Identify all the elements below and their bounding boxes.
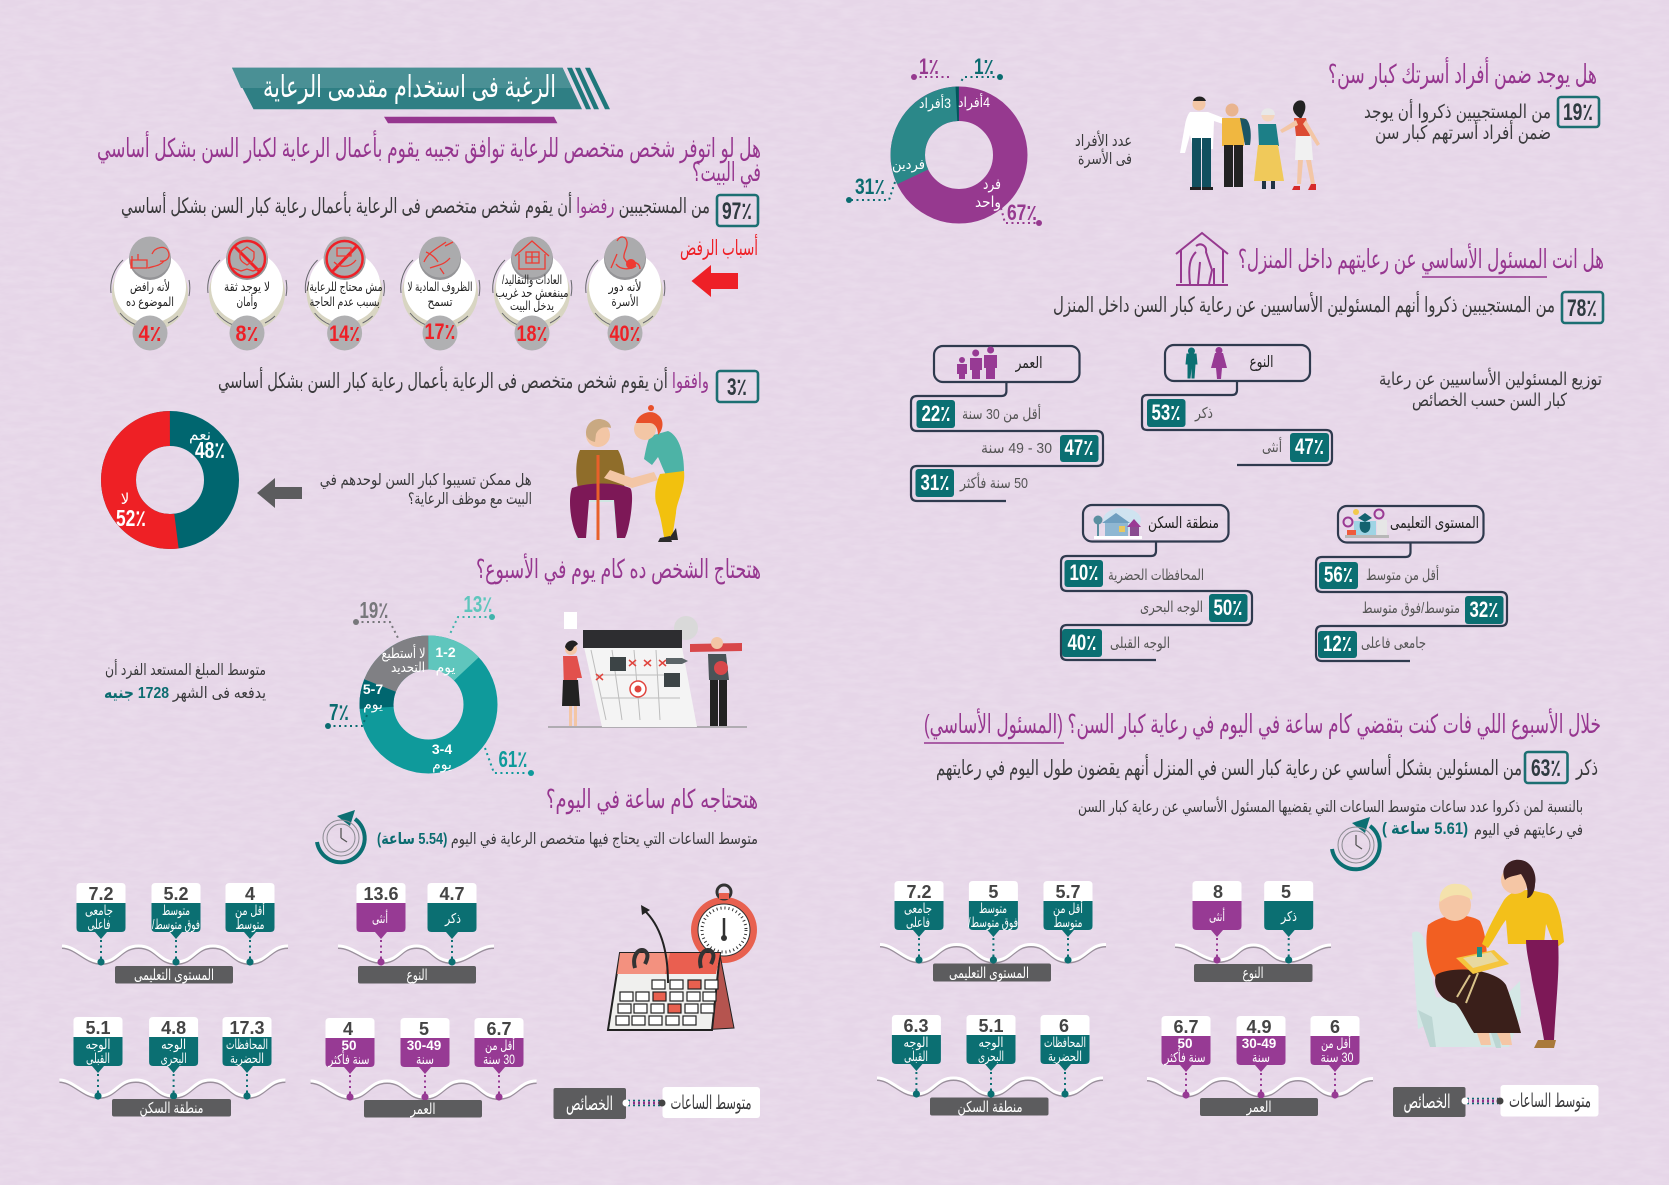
illustration: calendar and stopwatch (608, 885, 757, 1030)
card: age: 50 سنة فأكثر (959, 472, 1028, 492)
callout: 19 percent (353, 597, 399, 640)
callout group: gender right: 8 (1213, 882, 1223, 902)
text: leaving elderly alone: البيت مع موظف الرعاية؟ (408, 491, 532, 509)
callout group: gender right: النوع (1242, 965, 1264, 982)
callout: household 67 percent: 67٪ (1007, 200, 1037, 225)
icon: family silhouettes (957, 346, 997, 379)
card: residence: 10٪ (1070, 560, 1098, 585)
callout: household 31 percent: 31٪ (855, 174, 885, 199)
callout group: education right: 7.2 (906, 882, 932, 902)
donut chart: household size: فردين (892, 156, 925, 173)
donut chart: leave alone yes no: 52٪ (116, 505, 146, 531)
card: age: 47٪ (1064, 435, 1094, 460)
callout group: gender left (338, 883, 494, 984)
title banner: الرغبة فى استخدام مقدمى الرعاية (263, 71, 556, 104)
callout group: residence right (877, 1015, 1103, 1116)
reason: family role 40 (586, 236, 665, 350)
card: gender: 53٪ (1152, 400, 1180, 425)
callout group: education left: جامعى (85, 903, 113, 918)
callout: household 1 percent teal (960, 54, 1003, 83)
text: average amount: متوسط المبلغ المستعد الفرد أن (105, 659, 266, 680)
callout group: education right: متوسط (979, 901, 1007, 917)
title banner (232, 68, 610, 123)
reason: no need 14: مش محتاج للرعاية/ (307, 280, 383, 295)
illustration: carer with elderly woman (1412, 860, 1564, 1048)
callout group: residence left: الحضرية (230, 1051, 264, 1067)
card: gender: أنثى (1262, 437, 1282, 456)
heading: question line two: في البيت؟ (692, 157, 761, 187)
card: residence: المحافظات الحضرية (1108, 567, 1204, 584)
stat: 63 percent: ذكر (1575, 757, 1598, 780)
donut chart: days per week: 5-7 (363, 681, 383, 697)
callout group: age right: 30-49 (1242, 1036, 1276, 1051)
callout group: residence right: 5.1 (978, 1016, 1004, 1036)
text: distribution: كبار السن حسب الخصائص (1412, 390, 1567, 411)
stat: 3 percent agreed (218, 366, 758, 402)
card: education: 56٪ (1324, 562, 1353, 587)
donut chart: household size: 3أفراد (919, 94, 951, 112)
text: average hours main carer: في رعايتهم في اليوم (1474, 822, 1583, 840)
donut chart: household size: 4أفراد (958, 93, 990, 111)
stat: 97 percent refused: 97٪ (722, 198, 752, 225)
reason: family role 40: 40٪ (610, 321, 640, 346)
donut chart: leave alone yes no: 48٪ (195, 437, 225, 463)
reason: traditions 18 (493, 236, 572, 350)
callout group: gender right (1175, 881, 1331, 982)
donut chart: days per week: يوم (363, 696, 383, 713)
callout: 13 percent: 13٪ (464, 591, 492, 617)
card: residence: 40٪ (1068, 630, 1096, 655)
text: household size: عدد الأفراد (1075, 130, 1132, 151)
donut chart: days per week (363, 644, 480, 773)
stat: 97 percent refused (121, 191, 758, 226)
arrow: red (692, 265, 738, 297)
callout group: age right: سنة (1252, 1050, 1270, 1065)
reason: no trust 8: وأمان (236, 293, 258, 310)
callout: 61 percent (485, 746, 534, 776)
reason: finances 17 (401, 236, 480, 350)
reason: rejects topic 4: لأنه رافض (130, 279, 170, 295)
callout group: gender right: أنثى (1209, 907, 1225, 924)
reason: traditions 18: مينفعش حد غريب (496, 286, 568, 301)
callout group: education right (880, 881, 1106, 982)
callout group: residence left (59, 1017, 285, 1117)
callout group: gender right: 5 (1281, 882, 1291, 902)
stat: 63 percent (936, 752, 1598, 783)
callout group: residence right: البحرى (978, 1049, 1004, 1065)
icon: man (1186, 348, 1198, 378)
callout group: education right: فوق متوسط/ (968, 915, 1018, 931)
reason: rejects topic 4: 4٪ (138, 321, 162, 346)
donut chart: household size (892, 93, 1010, 211)
callout group: education left: متوسط (236, 917, 264, 933)
text: distribution: توزيع المسئولين الأساسيين عن رعاية (1379, 368, 1602, 390)
callout group: gender left: 4.7 (439, 884, 465, 904)
callout group: age left: سنة (416, 1052, 434, 1067)
stat: 19 percent (1364, 97, 1599, 144)
callout group: gender left: ذكر (444, 911, 461, 927)
callout group: age left: سنة فأكثر (328, 1050, 370, 1068)
callout: household 1 percent purple: 1٪ (919, 54, 939, 79)
callout group: age right: 50 (1177, 1036, 1193, 1051)
callout group: education right: 5.7 (1055, 882, 1081, 902)
stat: 3 percent agreed: 3٪ (727, 374, 747, 401)
callout group: gender left: النوع (406, 967, 428, 984)
card: education: جامعى فاعلى (1361, 635, 1426, 652)
callout group: education left: 4 (245, 884, 255, 904)
callout group: education left: 7.2 (88, 884, 114, 904)
callout: household 31 percent (846, 174, 895, 203)
card: gender (1142, 345, 1332, 465)
callout group: age right: 30 سنة (1320, 1050, 1354, 1065)
donut chart: household size: فرد (983, 176, 1001, 193)
reason: finances 17: تسمح (428, 295, 453, 309)
callout group: age left: 4 (343, 1019, 353, 1039)
heading: days per week: هتحتاج الشخص ده كام يوم في الأسبوع؟ (476, 552, 761, 585)
callout group: residence left: منطقة السكن (140, 1100, 204, 1117)
callout group: residence left: 4.8 (161, 1018, 186, 1038)
card: education (1316, 506, 1507, 661)
callout group: residence left: الوجه (86, 1037, 110, 1053)
callout group: gender right: ذكر (1280, 909, 1297, 925)
legend left (554, 1087, 760, 1119)
callout group: residence right: المحافظات (1044, 1035, 1086, 1050)
heading: hours per day: هتحتاجه كام ساعة في اليوم؟ (546, 784, 758, 815)
card: education: متوسط/فوق متوسط (1362, 600, 1460, 617)
callout group: age left: 30 سنة (483, 1052, 515, 1067)
reason: traditions 18: يدخل البيت (510, 299, 554, 313)
reason: family role 40: لأنه دور (608, 279, 642, 295)
callout group: residence right: 6 (1059, 1016, 1069, 1036)
callout group: age left: 50 (341, 1038, 357, 1053)
text: household size: فى الأسرة (1078, 148, 1132, 169)
donut chart: days per week: التحديد (391, 659, 425, 675)
text: average amount (104, 659, 266, 703)
callout group: age right: 6 (1330, 1017, 1340, 1037)
donut chart: days per week: 1-2 (435, 644, 456, 660)
heading: reasons for refusal: أسباب الرفض (680, 234, 758, 260)
callout group: age left: 5 (419, 1019, 429, 1039)
card: age: 30 - 49 سنة (981, 440, 1052, 457)
callout: 7 percent (325, 699, 368, 729)
callout group: education right: المستوى التعليمى (949, 965, 1029, 982)
card: age (911, 346, 1103, 501)
callout: 7 percent: 7٪ (329, 699, 349, 725)
callout group: age right: 6.7 (1173, 1017, 1199, 1037)
card: education: 12٪ (1323, 631, 1352, 656)
text: average hours: متوسط الساعات التي يحتاج فيها متخصص الرعاية في اليوم (5.54 ساعة) (377, 831, 758, 849)
callout group: residence right: القبلى (904, 1049, 928, 1064)
callout group: education right: فاعلى (906, 915, 930, 930)
icon: education (1344, 509, 1389, 538)
donut chart: days per week: لا أستطيع (382, 644, 426, 662)
callout group: education left: المستوى التعليمى (134, 967, 214, 984)
heading: question on carer: هل لو اتوفر شخص متخصص للرعاية توافق تجيبه يقوم بأعمال الرعاية لكبار السن بشكل أساسي (97, 129, 761, 164)
callout group: education right: 5 (988, 882, 998, 902)
card: residence: 50٪ (1214, 595, 1242, 620)
callout group: education left: فوق متوسط/ (152, 917, 200, 933)
callout group: residence right: الوجه (978, 1035, 1004, 1051)
icon: house with elderly (1176, 233, 1228, 285)
callout group: residence right: الوجه (904, 1035, 928, 1051)
callout group: age left: 6.7 (486, 1019, 512, 1039)
card: age: 31٪ (920, 470, 950, 495)
icon: clock right (1332, 817, 1380, 869)
callout group: age right: أقل من (1321, 1034, 1351, 1052)
donut chart: days per week: يوم (432, 756, 452, 773)
stat: 19 percent: من المستجيبين ذكروا أن يوجد (1364, 99, 1551, 123)
text: leaving elderly alone: هل ممكن تسيبوا كبار السن لوحدهم في (320, 472, 532, 490)
card: age: أقل من 30 سنة (962, 404, 1041, 423)
text: distribution (1379, 368, 1602, 411)
donut chart: leave alone yes no: نعم (189, 427, 211, 444)
callout group: education left: أقل من (235, 901, 265, 919)
reason: no need 14 (305, 236, 384, 350)
icon: woman (1211, 347, 1227, 379)
callout group: residence right: 6.3 (903, 1016, 929, 1036)
text: average amount: يدفعه فى الشهر 1728 جنيه (104, 685, 266, 703)
callout group: age left: أقل من (485, 1036, 515, 1054)
legend left: متوسط الساعات (670, 1093, 752, 1114)
card: education: المستوى التعليمى (1390, 515, 1479, 533)
legend right (1393, 1085, 1598, 1117)
illustration: carer with elderly man (570, 405, 684, 542)
legend right: الخصائص (1404, 1092, 1450, 1113)
donut chart: household size: واحد (975, 194, 1001, 211)
callout group: residence left: 17.3 (229, 1018, 265, 1038)
illustration: family group (1180, 96, 1320, 190)
card: education: 32٪ (1470, 597, 1498, 622)
card: residence: الوجه القبلى (1110, 635, 1170, 652)
reason: finances 17: 17٪ (424, 319, 456, 344)
donut chart: leave alone yes no (116, 427, 225, 532)
callout group: residence left: البحرى (161, 1051, 187, 1067)
card: gender: النوع (1250, 354, 1274, 372)
stat: 63 percent: 63٪ (1531, 755, 1561, 782)
reason: family role 40: الأسرة (612, 294, 638, 310)
donut chart: days per week: يوم (436, 659, 456, 676)
card: residence (1061, 505, 1252, 660)
text: leaving elderly alone (320, 472, 532, 509)
callout group: education right: أقل من (1053, 899, 1083, 917)
stat: 19 percent: 19٪ (1563, 99, 1593, 126)
callout group: age right: العمر (1246, 1099, 1272, 1116)
callout group: education right: جامعى (904, 901, 932, 916)
card: education: أقل من متوسط (1366, 565, 1439, 584)
reason: traditions 18: العادات والتقاليد/ (502, 273, 562, 288)
callout group: residence left: الوجه (161, 1037, 186, 1053)
reason: no trust 8: لا يوجد ثقة (224, 280, 270, 295)
callout group: age right (1147, 1016, 1373, 1116)
text: average hours main carer (1078, 796, 1583, 840)
card: age: العمر (1015, 355, 1042, 373)
callout: 19 percent: 19٪ (360, 597, 388, 623)
callout group: age right: سنة فأكثر (1164, 1048, 1206, 1066)
reason: no need 14: بسبب عدم الحاجة (310, 295, 380, 309)
callout group: age left: العمر (410, 1101, 436, 1118)
callout: household 1 percent purple (911, 54, 952, 80)
reason: no trust 8: 8٪ (236, 321, 258, 346)
callout group: residence left: القبلى (86, 1051, 110, 1066)
arrow: grey (257, 478, 302, 508)
callout group: education left: متوسط (162, 903, 190, 919)
illustration: people with calendar (548, 612, 747, 727)
stat: 19 percent: ضمن أفراد أسرتهم كبار سن (1375, 120, 1551, 144)
callout group: education right: متوسط (1054, 915, 1082, 931)
text: household size (1075, 130, 1132, 169)
card: gender: ذكر (1194, 405, 1213, 422)
callout group: age left (311, 1018, 537, 1118)
donut chart: leave alone yes no: لا (121, 491, 129, 508)
card: gender: 47٪ (1295, 434, 1324, 459)
callout group: age right: 4.9 (1246, 1017, 1272, 1037)
callout group: gender left: أنثى (372, 909, 388, 926)
callout: 13 percent (449, 591, 495, 636)
callout group: education left (62, 883, 288, 984)
card: residence: الوجه البحرى (1140, 599, 1203, 616)
callout group: gender left: 13.6 (363, 884, 399, 904)
donut chart: days per week: 3-4 (432, 741, 452, 757)
callout group: residence right: الحضرية (1048, 1049, 1082, 1065)
callout group: education left: 5.2 (163, 884, 189, 904)
legend left: الخصائص (566, 1094, 613, 1115)
icon: house (1094, 508, 1142, 539)
reason: no need 14: 14٪ (329, 321, 360, 346)
callout group: residence left: المحافظات (226, 1037, 268, 1052)
callout: household 1 percent teal: 1٪ (974, 54, 994, 79)
reason: rejects topic 4: الموضوع ده (126, 295, 174, 310)
stat: 78 percent: 78٪ (1567, 295, 1597, 322)
callout: 61 percent: 61٪ (498, 746, 528, 772)
stat: 3 percent agreed: وافقوا أن يقوم شخص متخصص فى الرعاية بأعمال رعاية كبار السن بشكل أساسي (218, 366, 709, 393)
callout group: education left: فاعلى (88, 917, 110, 932)
callout group: residence left: 5.1 (85, 1018, 111, 1038)
stat: 78 percent (1053, 291, 1603, 323)
legend right: متوسط الساعات (1509, 1091, 1591, 1112)
callout group: residence right: منطقة السكن (958, 1099, 1022, 1116)
reason: no trust 8 (208, 236, 287, 350)
reason: traditions 18: 18٪ (516, 321, 548, 346)
reason: finances 17: الظروف المادية لا (408, 280, 472, 295)
card: residence: منطقة السكن (1148, 515, 1219, 533)
reason: rejects topic 4 (111, 236, 190, 350)
stat: 97 percent refused: من المستجيبين رفضوا أن يقوم شخص متخصص فى الرعاية بأعمال رعاية كبار السن بشكل أساسي (121, 191, 710, 218)
callout group: age left: 30-49 (407, 1038, 441, 1053)
icon: clock left (317, 810, 365, 862)
text: average hours main carer: (5.61 ساعة ) (1382, 819, 1468, 838)
card: age: 22٪ (922, 401, 950, 426)
